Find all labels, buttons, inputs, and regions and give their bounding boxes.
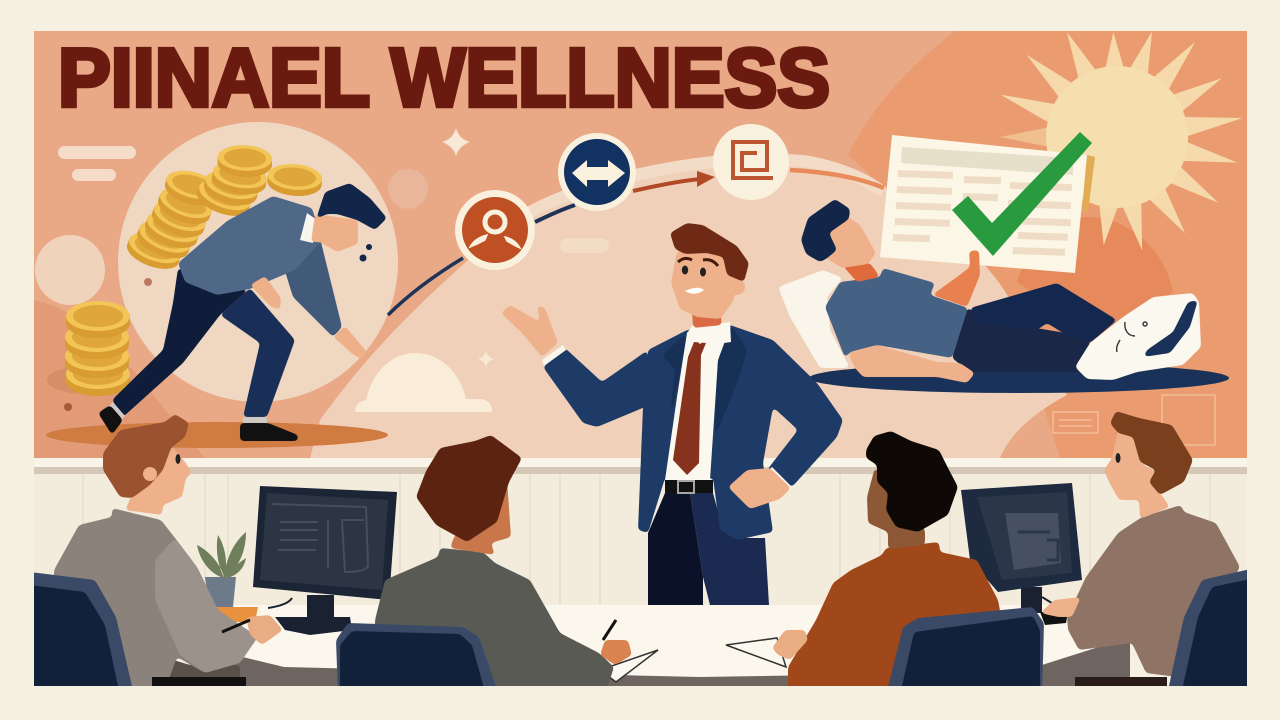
shirt: [665, 322, 731, 480]
face: [1104, 430, 1170, 519]
socks: [108, 402, 267, 423]
face: [671, 251, 740, 319]
right monitor: [961, 483, 1082, 613]
eye: [1116, 453, 1120, 463]
sweater: [178, 196, 322, 295]
sweater: [375, 548, 614, 695]
sweat drops: [360, 244, 372, 262]
hand near: [252, 277, 281, 308]
icon: green check: [952, 132, 1092, 256]
hair: [801, 199, 850, 262]
right hand: [728, 468, 791, 509]
front leg: [220, 288, 295, 417]
chart outline sketches: [1053, 395, 1215, 445]
smile: [685, 288, 704, 294]
neck: [844, 263, 878, 282]
figure: right colleague: [1040, 411, 1240, 677]
lower arm: [848, 345, 975, 383]
coin shadow: [47, 368, 80, 394]
face: [826, 216, 876, 268]
centre-right chair: [886, 607, 1044, 695]
hand: [772, 630, 808, 660]
trousers dark: [648, 493, 703, 605]
collar: [687, 322, 731, 345]
sweater: [1067, 505, 1240, 677]
orange notebook: [216, 607, 258, 622]
right chair base: [1075, 677, 1167, 686]
hand: [246, 615, 283, 645]
buckle: [678, 481, 694, 493]
hand far: [334, 328, 366, 358]
coins on back: [123, 144, 323, 275]
table: [190, 605, 1130, 686]
eye: [176, 454, 180, 464]
sweater: [788, 542, 1000, 695]
figure: presenter: [501, 223, 843, 605]
icon: person search: [455, 190, 535, 270]
notepad: [600, 650, 658, 682]
pen: [222, 620, 250, 632]
pen: [603, 620, 616, 640]
hair: [670, 223, 749, 282]
pillow: [778, 270, 850, 368]
jacket: [638, 325, 843, 540]
decorative pills: [58, 146, 609, 253]
shoes: [98, 405, 298, 441]
left chair: [30, 572, 134, 695]
left monitor: [253, 486, 397, 635]
slippers: [1075, 293, 1201, 380]
neck: [692, 310, 722, 328]
upper leg: [970, 283, 1117, 343]
shirt: [825, 268, 968, 358]
figure: relaxed man on mat: [778, 132, 1229, 393]
hair: [416, 435, 522, 542]
hair: [316, 183, 387, 230]
panel: lower wall: [34, 458, 1247, 608]
figure: stressed worker with coins: [98, 144, 387, 441]
tie: [673, 342, 706, 475]
figure: left colleague: [54, 414, 283, 690]
centre-left chair: [336, 623, 499, 695]
hair: [866, 431, 958, 532]
face: [125, 445, 192, 515]
ear: [143, 467, 157, 481]
cloud: [355, 353, 492, 412]
cuff left: [542, 345, 566, 366]
collar: [300, 213, 314, 243]
keyboard right: [1040, 612, 1068, 625]
figure: centre-right colleague: [772, 431, 1000, 695]
eyes and brows: [678, 258, 718, 266]
document: [880, 135, 1095, 273]
hair: [103, 414, 189, 498]
title: PIINAEL WELLNESS: [58, 31, 830, 124]
cuff right: [767, 467, 792, 492]
under shadow: [140, 650, 240, 686]
plant: [197, 532, 246, 607]
panel: mural background: [34, 31, 1247, 458]
back leg: [112, 268, 248, 417]
ear: [729, 279, 745, 295]
neck: [450, 480, 511, 555]
icon: sun: [997, 28, 1244, 253]
skin: [867, 467, 925, 549]
coin pile on floor: [65, 301, 130, 396]
belt: [665, 480, 713, 493]
face: [311, 214, 358, 252]
far arm: [286, 242, 342, 336]
right chair: [1167, 568, 1255, 695]
notepad right: [726, 638, 786, 667]
icon: square spiral: [713, 124, 789, 200]
hand: [1040, 597, 1081, 617]
lower leg: [952, 308, 1090, 372]
lapel left: [662, 333, 687, 460]
hand: [600, 640, 632, 665]
lapel right: [714, 325, 747, 440]
left arm: [543, 348, 648, 427]
mat: [810, 367, 1229, 393]
sweater: [54, 508, 258, 690]
hair: [1110, 411, 1193, 495]
arm: [155, 538, 258, 673]
ground shadow: [46, 422, 388, 448]
arrow: progress arc: [388, 170, 884, 315]
icon: two-way arrow: [558, 133, 636, 211]
trousers light: [690, 493, 769, 605]
left hand: [501, 305, 558, 357]
figure: centre-left colleague: [375, 435, 632, 695]
raised arm: [932, 250, 980, 307]
black chair base: [152, 677, 246, 686]
sparkle: [442, 128, 470, 156]
small sparkle: [478, 350, 494, 368]
